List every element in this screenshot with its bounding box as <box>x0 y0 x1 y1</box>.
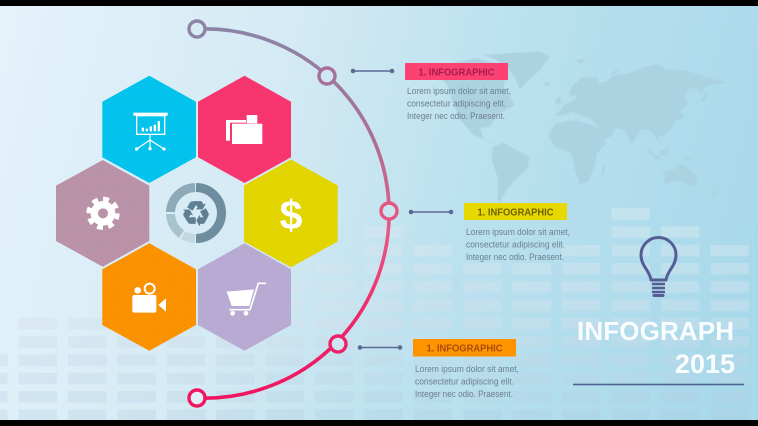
equalizer background pattern <box>0 200 758 420</box>
body text: consectetur adipiscing elit. <box>466 240 565 250</box>
icon: recycling symbol: ♻ <box>181 194 211 234</box>
label text: 1. INFOGRAPHIC <box>426 344 502 354</box>
label bar <box>464 203 567 220</box>
callout 1 <box>351 63 511 121</box>
body text <box>466 227 570 262</box>
callout 3 <box>358 339 519 399</box>
icon: gear <box>89 200 117 227</box>
icon: dollar sign: $ <box>280 192 303 238</box>
body text: consectetur adipiscing elit. <box>415 376 514 386</box>
hexagon: yellow dollar <box>244 160 338 267</box>
timeline arc <box>189 21 397 406</box>
label text: 1. INFOGRAPHIC <box>418 68 494 78</box>
hexagon: orange camera <box>102 243 196 351</box>
node: second callout <box>381 203 397 219</box>
connector <box>409 210 453 214</box>
callout 2 <box>409 203 570 262</box>
body text <box>415 364 519 399</box>
node: bottom <box>189 390 205 406</box>
hexagon: lavender cart <box>198 243 291 351</box>
label bar <box>405 63 508 80</box>
body text: Integer nec odio. Praesent. <box>407 111 505 121</box>
connector <box>358 346 402 349</box>
icon: presentation board <box>133 113 168 151</box>
icon: video camera <box>132 284 166 313</box>
node: third callout <box>330 336 346 352</box>
connector <box>351 69 394 73</box>
body text <box>407 86 511 121</box>
icon: folder <box>226 115 262 144</box>
hexagon cluster <box>56 76 338 351</box>
title <box>577 316 735 379</box>
icon: light bulb <box>641 238 676 296</box>
label text: 1. INFOGRAPHIC <box>478 208 554 218</box>
donut chart <box>170 188 222 238</box>
center recycling badge <box>170 188 222 238</box>
title underline <box>573 384 744 385</box>
body text: Lorem ipsum dolor sit amet, <box>415 364 519 374</box>
node: top <box>189 21 205 37</box>
body text: consectetur adipiscing elit. <box>407 98 506 108</box>
hexagon: mauve gear <box>56 160 149 267</box>
body text: Integer nec odio. Praesent. <box>466 252 564 262</box>
hexagon: pink folder <box>198 76 291 183</box>
body text: Lorem ipsum dolor sit amet, <box>466 227 570 237</box>
body text: Integer nec odio. Praesent. <box>415 389 513 399</box>
title: INFOGRAPH <box>577 316 734 346</box>
label bar <box>413 339 516 356</box>
world map <box>433 52 727 202</box>
hexagon: cyan presentation <box>102 76 196 183</box>
body text: Lorem ipsum dolor sit amet, <box>407 86 511 96</box>
node: first callout <box>319 68 335 84</box>
icon: shopping cart <box>227 283 266 316</box>
title: 2015 <box>675 349 735 379</box>
